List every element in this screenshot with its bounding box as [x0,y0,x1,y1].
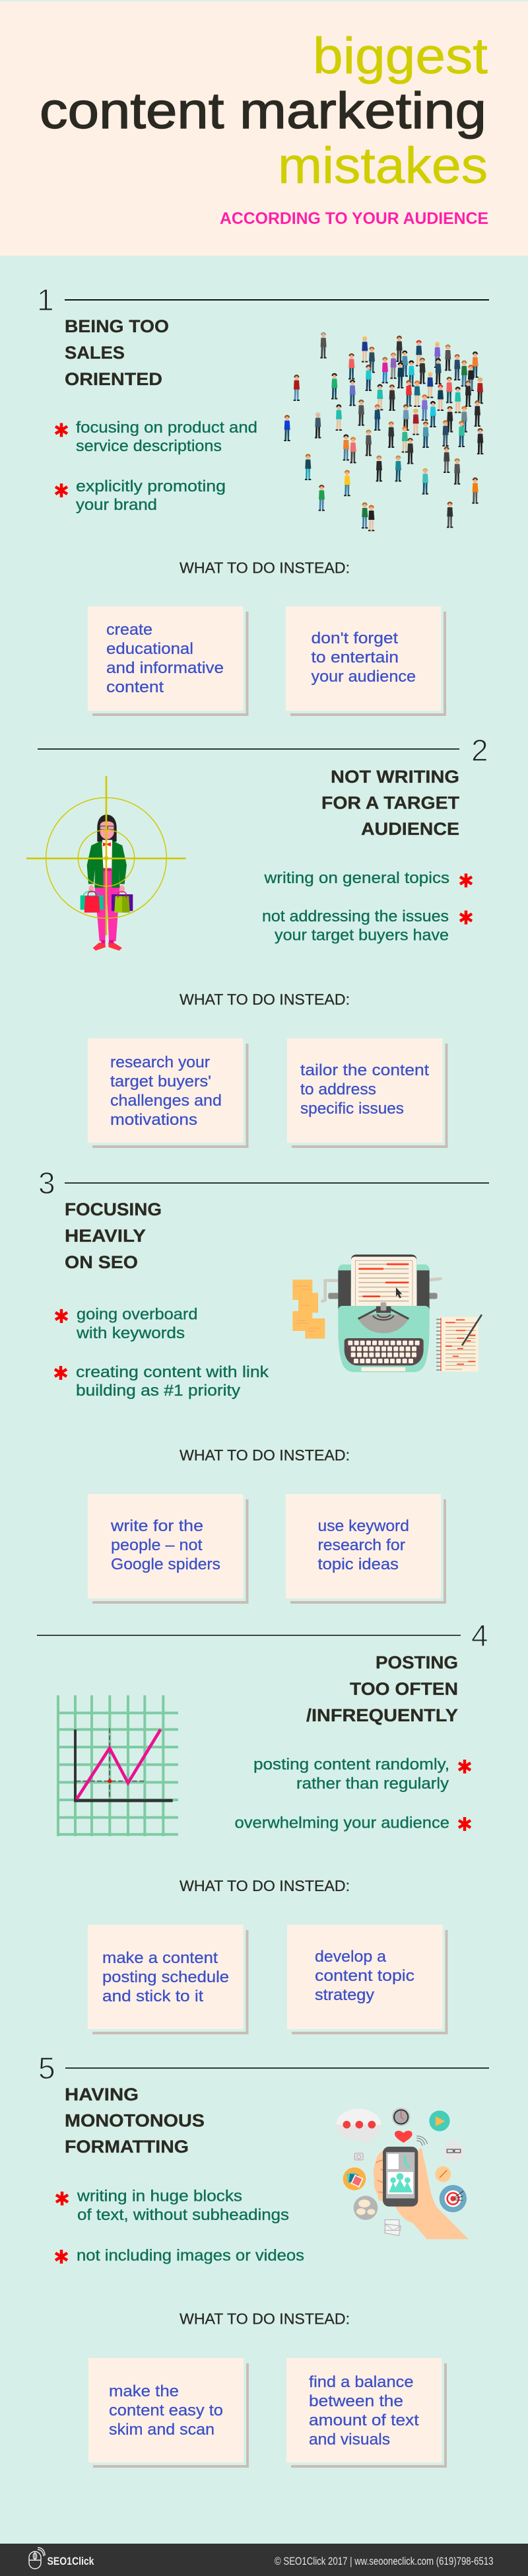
subtitle: ACCORDING TO YOUR AUDIENCE [220,209,488,228]
play icon [429,2110,450,2131]
heading: FOR A TARGET [321,793,460,812]
glasses badge [444,2141,464,2161]
bubbles badge [354,2196,378,2220]
target badge [440,2185,467,2212]
card: tailor content: specific issues [300,1100,404,1118]
card: write for people: Google spiders [111,1556,220,1573]
number 3: 3 [38,1166,55,1200]
heading [321,767,460,839]
bullet: link building: building as #1 priority [76,1382,240,1400]
heading: MONOTONOUS [65,2111,205,2131]
card: balance text and visuals: amount of text [309,2412,419,2429]
card: tailor content: to address [300,1081,376,1098]
bullet: huge blocks [56,2188,289,2224]
card: research buyers: motivations [110,1111,197,1129]
title: mistakes [278,137,488,194]
card: write for people [88,1494,247,1602]
heading: FOCUSING [65,1199,162,1219]
card: entertain: your audience [312,668,416,686]
pencil badge [435,2166,451,2182]
card: write for people: write for the [110,1517,203,1535]
envelope [385,2220,401,2236]
card: balance text and visuals: between the [309,2392,403,2410]
heading: HEAVILY [65,1226,146,1246]
what to do instead heading: WHAT TO DO INSTEAD: [180,1877,350,1894]
bullet: keywords: going overboard [77,1305,198,1324]
bullet: promoting brand: your brand [76,496,157,514]
bullet: posting randomly: rather than regularly [296,1775,449,1793]
illustration: woman in target [26,776,186,950]
card: posting schedule: posting schedule [102,1968,229,1986]
card: topic strategy [287,1925,446,2033]
heading: BEING TOO [65,316,169,336]
heading [65,2085,205,2157]
card: educational content: create [106,621,152,639]
bullet: huge blocks: of text, without subheadings [77,2206,289,2224]
card: tailor content [287,1038,446,1147]
card: write for people: people – not [111,1536,203,1554]
card: posting schedule: make a content [102,1949,218,1967]
typewriter body top [338,1264,430,1289]
card: research buyers [88,1038,247,1147]
card: tailor content: tailor the content [300,1061,429,1079]
heading: /INFREQUENTLY [306,1705,458,1725]
bullet: posting randomly [253,1756,471,1793]
bullet: posting randomly: posting content randomly, [253,1756,449,1773]
card: balance text and visuals: and visuals [309,2431,390,2449]
title: biggest [313,28,488,85]
card: topic strategy: strategy [315,1986,374,2004]
heading [65,1199,162,1272]
card: entertain [286,606,445,715]
what to do instead heading: WHAT TO DO INSTEAD: [180,2310,350,2328]
card: educational content: and informative [106,659,224,677]
clock [392,2108,411,2126]
phone [383,2147,418,2207]
section 2 panel [26,733,488,1147]
heading: ORIENTED [65,369,162,389]
illustration: crowd [284,333,483,531]
bullet: not addressing issues [262,908,472,945]
illustration: typewriter [292,1254,481,1372]
header panel [0,1,528,256]
bullet: general topics: writing on general topics [263,869,449,887]
card: keyword research: topic ideas [318,1556,399,1573]
paper [351,1254,416,1308]
card: skim and scan: content easy to [109,2402,223,2419]
bullet: keywords: with keywords [76,1324,185,1342]
levers [322,1279,440,1301]
heart [395,2131,412,2143]
card: entertain: don't forget [312,629,398,647]
what to do instead heading: WHAT TO DO INSTEAD: [180,559,350,576]
section 1 panel [37,283,489,715]
heading [306,1653,458,1725]
illustration: hand with phone and icons [336,2108,469,2239]
card: posting schedule [88,1925,247,2033]
keyboard [345,1338,424,1365]
hair [97,814,117,842]
section 4 panel [37,1618,488,2033]
bullet: promoting brand: explicitly promoting [76,478,226,495]
bullet: promoting brand [55,478,226,514]
bullet: overwhelming: overwhelming your audience [235,1814,449,1832]
bullet: huge blocks: writing in huge blocks [77,2188,242,2205]
type basket [358,1314,409,1333]
card: entertain: to entertain [312,649,399,666]
card: topic strategy: develop a [315,1948,387,1966]
bullet: product descriptions: focusing on product and [76,419,257,437]
icon: mouse logo [29,2548,45,2569]
heading: FORMATTING [65,2137,189,2157]
number 4: 4 [471,1618,488,1653]
hand [374,2148,469,2239]
bullet: link building [55,1363,269,1400]
heading: HAVING [65,2085,139,2104]
card: balance text and visuals: find a balance [309,2373,413,2391]
heading: SALES [65,343,125,363]
bullet: product descriptions: service descriptions [76,437,222,455]
heading: TOO OFTEN [350,1679,458,1699]
speech bubble [336,2109,381,2147]
heading: NOT WRITING [331,767,459,787]
number 2: 2 [471,733,488,768]
number 1: 1 [37,283,54,317]
card: educational content [88,606,247,715]
card: research buyers: challenges and [110,1092,222,1110]
bullet: link building: creating content with link [76,1363,269,1381]
card: skim and scan: skim and scan [109,2421,214,2439]
card: topic strategy: content topic [315,1967,414,1985]
notebook with pen [439,1317,478,1372]
footer [0,2544,528,2576]
card: research buyers: research your [110,1054,210,1071]
number 5: 5 [38,2051,55,2085]
what to do instead heading: WHAT TO DO INSTEAD: [180,1447,350,1464]
title: content marketing [40,83,486,139]
card: skim and scan: make the [109,2382,179,2400]
heading: AUDIENCE [361,819,459,839]
body [338,1306,430,1372]
crosshair [26,776,186,935]
camera badge [353,2151,365,2163]
logo text: SEO1Click [48,2555,94,2567]
sticky notes [292,1279,325,1339]
bullet: keywords [55,1305,198,1342]
photos badge [343,2167,366,2190]
bullet: not addressing issues: your target buyers have [275,926,449,945]
title [40,28,488,194]
bullet: images or videos: not including images or videos [77,2247,304,2264]
section 5 panel [38,2051,489,2466]
card: skim and scan [88,2358,248,2466]
card: educational content: educational [106,640,193,658]
card: balance text and visuals [286,2358,446,2466]
what to do instead heading: WHAT TO DO INSTEAD: [180,991,350,1008]
heading [65,316,169,389]
card: educational content: content [106,678,164,696]
signal [416,2136,427,2146]
bullet: product descriptions [55,419,257,455]
card: keyword research [286,1494,445,1602]
heading: POSTING [376,1653,458,1672]
section 3 panel [38,1166,489,1602]
chart: line graph on grid [57,1696,178,1836]
card: posting schedule: and stick to it [102,1987,203,2005]
bullet: not addressing issues: not addressing the issues [262,908,449,925]
heading: ON SEO [65,1252,138,1272]
card: keyword research: use keyword [318,1517,409,1535]
card: keyword research: research for [318,1536,405,1554]
card: research buyers: target buyers' [110,1073,211,1091]
